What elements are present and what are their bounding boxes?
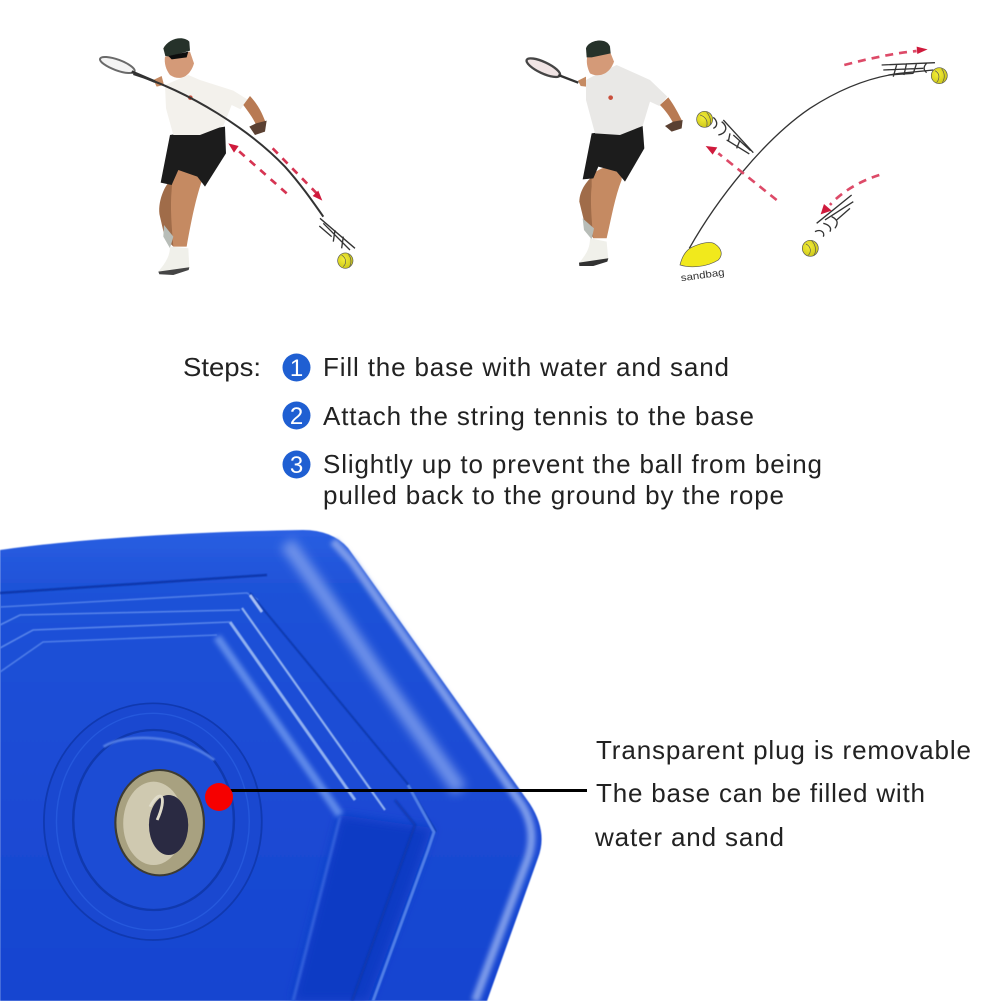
step 3 text: pulled back to the ground by the rope bbox=[323, 480, 784, 510]
callout text: Transparent plug is removable bbox=[596, 735, 971, 765]
motion lines bbox=[319, 218, 355, 250]
step 2 bbox=[282, 401, 754, 431]
top stepped ridges bbox=[0, 575, 267, 672]
lit shoulder streak bbox=[287, 543, 460, 790]
panel: player with elastic cord, left diagram bbox=[98, 38, 355, 275]
badge 1 bbox=[282, 354, 310, 382]
drain plug seat rings bbox=[44, 703, 262, 940]
dark stepped recess bbox=[293, 815, 432, 1001]
motion lines bbox=[713, 63, 935, 237]
badge 2 bbox=[282, 402, 310, 430]
callout text: water and sand bbox=[594, 822, 784, 852]
outer lip highlight bbox=[333, 541, 531, 1001]
icon: tennis ball bbox=[338, 253, 353, 268]
icon: left player bbox=[153, 38, 267, 275]
red arrow: middle bbox=[706, 146, 777, 200]
callout: red marker dot bbox=[205, 783, 233, 811]
step 3 text: Slightly up to prevent the ball from being bbox=[323, 449, 822, 479]
sandbag label: sandbag bbox=[680, 267, 725, 284]
badge 2: 2 bbox=[290, 403, 303, 430]
step 3 text bbox=[323, 449, 822, 510]
transparent plug bbox=[115, 770, 204, 875]
badge 3 bbox=[282, 450, 310, 479]
red arrow: top right bbox=[844, 47, 928, 65]
step 1 bbox=[282, 352, 729, 382]
badge 1: 1 bbox=[290, 355, 303, 382]
callout text bbox=[594, 735, 971, 852]
elastic cord bbox=[133, 74, 323, 217]
icon: ball, top right bbox=[931, 68, 947, 84]
heading: steps: Steps: bbox=[183, 352, 261, 382]
icon: ball, middle bbox=[697, 111, 713, 127]
base body bbox=[0, 530, 542, 1001]
icon: racket bbox=[98, 54, 155, 82]
step 1 text: Fill the base with water and sand bbox=[323, 352, 729, 382]
panel: blue hexagonal base photo bbox=[0, 530, 542, 1001]
step 3 bbox=[282, 449, 822, 510]
red arrow: returning bbox=[228, 143, 287, 193]
callout text: The base can be filled with bbox=[596, 778, 925, 808]
icon: ball, lower bbox=[802, 240, 818, 256]
callout: pointer line bbox=[219, 789, 587, 792]
badge 3: 3 bbox=[290, 452, 303, 479]
step 2 text: Attach the string tennis to the base bbox=[323, 401, 754, 431]
icon: right player bbox=[578, 40, 683, 266]
red arrow: outgoing bbox=[273, 148, 322, 201]
panel: player with sandbag and ball, right diagram bbox=[524, 40, 947, 284]
icon: sandbag bbox=[680, 242, 725, 284]
plug seat and plug, drawn in zoom coordinates bbox=[44, 703, 262, 940]
red arrow: lower bbox=[821, 175, 879, 214]
elastic cord to sandbag bbox=[689, 70, 933, 248]
diagonal stepped ridges bbox=[217, 593, 436, 1001]
icon: racket bbox=[524, 55, 578, 83]
